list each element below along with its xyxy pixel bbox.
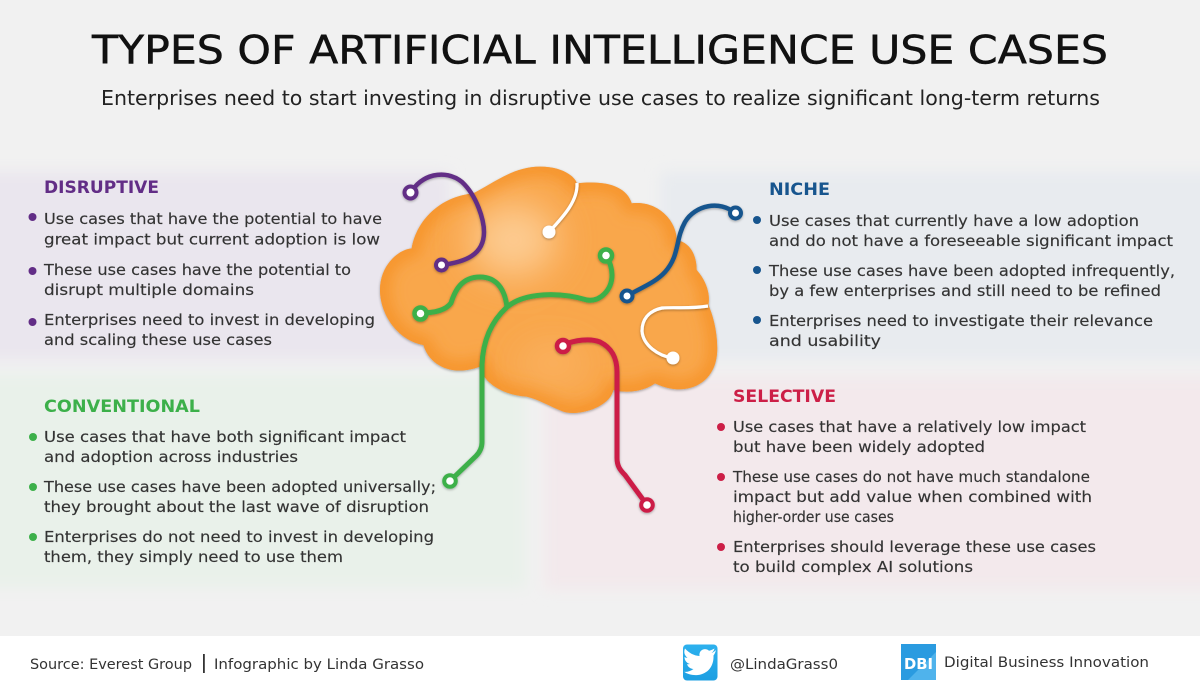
red wire [557,340,653,511]
green wire [414,250,612,487]
bullets: disruptive [28,213,36,326]
text block: niche points: and usability [769,332,881,350]
heading: disruptive: DISRUPTIVE [44,178,159,198]
source credit: Source: Everest Group [30,656,192,673]
bullets: niche [753,216,761,324]
text block: niche points [768,212,1175,350]
text block: disruptive points: and scaling these use cases [44,331,272,349]
text block: disruptive points: These use cases have the potential to [43,261,351,279]
icon: DBI logo [901,644,936,680]
icon: twitter [683,644,718,680]
brain shape [380,167,717,413]
white wire: top [542,183,577,238]
text block: selective points: Enterprises should leverage these use cases [733,538,1096,556]
heading: conventional: CONVENTIONAL [44,397,200,417]
text block: selective points: impact but add value when combined with [733,488,1092,506]
text block: disruptive points: Enterprises need to invest in developing [44,311,375,329]
bullets: conventional [29,433,37,541]
text block: niche points: and do not have a foreseeable significant impact [769,232,1173,250]
text block: niche points: These use cases have been adopted infrequently, [768,262,1175,280]
panel: selective text [717,387,1096,576]
text block: selective points: Use cases that have a relatively low impact [733,418,1086,436]
subtitle: Enterprises need to start investing in disruptive use cases to realize significant long-term returns [101,86,1100,110]
heading: niche: NICHE [769,180,830,200]
bullets: selective [717,423,725,551]
text block: disruptive points: Use cases that have the potential to have [44,210,382,228]
text block: selective points: to build complex AI solutions [733,558,973,576]
white wire: right [642,306,708,364]
brand name: Digital Business Innovation [944,654,1149,671]
text block: disruptive points: great impact but current adoption is low [44,230,380,248]
text block: niche points: Enterprises need to investigate their relevance [769,312,1153,330]
panel: disruptive background [0,172,450,360]
blue wire [622,206,741,302]
panel: conventional text [29,397,436,566]
heading: selective: SELECTIVE [733,387,836,407]
text block: conventional points: These use cases have been adopted universally; [43,478,436,496]
text block: conventional points: them, they simply need to use them [44,548,343,566]
panel: selective background [544,376,1200,590]
text block: conventional points: Enterprises do not need to invest in developing [44,528,434,546]
text block: disruptive points [43,210,382,349]
icon: DBI logo: DBI [904,655,933,673]
text block: conventional points: and adoption across industries [44,448,298,466]
twitter handle: @LindaGrass0 [730,656,838,673]
source credit: Infographic by Linda Grasso [214,656,424,673]
text block: conventional points: Use cases that have both significant impact [44,428,406,446]
source credit [30,654,424,673]
title: TYPES OF ARTIFICIAL INTELLIGENCE USE CASES [91,28,1108,74]
text block: selective points [732,418,1096,576]
text block: disruptive points: disrupt multiple domains [44,281,254,299]
panel: niche text [753,180,1175,350]
text block: niche points: Use cases that currently have a low adoption [769,212,1139,230]
text block: conventional points: they brought about the last wave of disruption [44,498,429,516]
footer [0,636,1200,687]
footer background [0,636,1200,687]
text block: selective points: but have been widely adopted [733,438,985,456]
text block: selective points: These use cases do not have much standalone [732,468,1090,486]
purple wire [404,175,484,270]
panel: niche background [660,172,1200,360]
panel: conventional background [0,374,526,588]
text block: niche points: by a few enterprises and still need to be refined [769,282,1161,300]
text block: selective points: higher-order use cases [733,508,894,526]
icon: brain with connector wires [380,167,741,511]
panel: disruptive text [28,178,382,349]
text block: conventional points [43,428,436,566]
